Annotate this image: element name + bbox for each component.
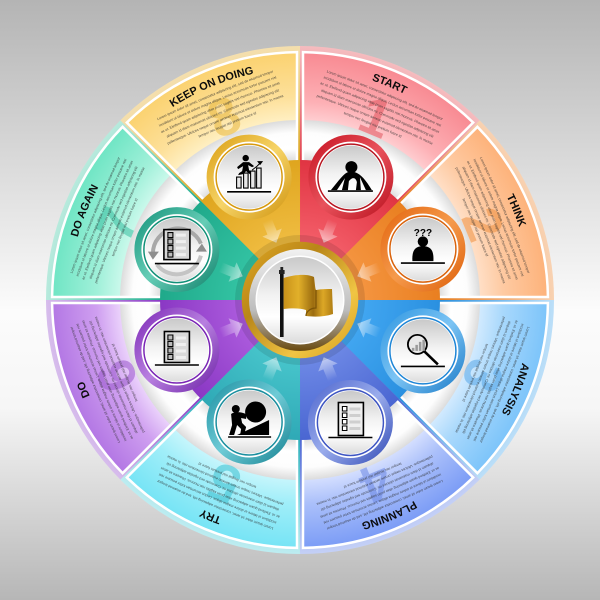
text block: keep on doing: aliquam id diam maecenas ultricies mi. Commodo sed egestas adipiscing elit [165, 87, 280, 139]
text block: do [70, 316, 146, 443]
icon: try boulder pusher [207, 380, 292, 464]
arrow: do again to centre [217, 257, 247, 286]
text block: analysis: aliquam id diam maecenas ultricies mi. Commodo sed egestas adipiscing elit [462, 321, 510, 434]
icon: keep on doing runner and bars [207, 135, 292, 220]
text block: do again: pellentesque. Ultrices neque ornare aenean euismod elementum nisi. In massa [93, 166, 146, 284]
heading: do again: DO AGAIN [67, 182, 102, 239]
icon: centre gold flag badge [242, 242, 358, 358]
text block: do again [70, 157, 144, 284]
icon: do again checklist with cycle arrows [134, 207, 219, 292]
text block: do: pellentesque. Ultrices neque ornare aenean euismod elementum nisi. In massa [92, 316, 146, 434]
text block: try [157, 456, 284, 530]
text block: planning: incididunt ut labore et dolore magna aliqua. Lectus accumsan tortor posuere nisl [324, 474, 442, 524]
text block: think: ac ut. Eleifend quam adipiscing vitae proin sagittis nisl rhoncus. Pharetra sit amet [467, 161, 518, 280]
text block: keep on doing: tempor nec feugiat nisl pretium fusce id [198, 111, 257, 139]
heading: planning: PLANNING [362, 501, 418, 530]
text block: think: tempor nec feugiat nisl pretium fusce id [462, 198, 488, 256]
text block: start [316, 70, 443, 144]
text block: think: aliquam id diam maecenas ultricies mi. Commodo sed egestas adipiscing elit [462, 166, 511, 280]
text block: planning: pellentesque. Ultrices neque ornare aenean euismod elementum nisi. In massa [316, 454, 433, 505]
text block: keep on doing: incididunt ut labore et dolore magna aliqua. Lectus accumsan tortor posuere nisl [158, 74, 277, 128]
panel: try sector [120, 341, 300, 554]
text block: analysis: tempor nec feugiat nisl pretium fusce id [462, 344, 488, 402]
number 7: 7 [85, 200, 150, 249]
text block: start: incididunt ut labore et dolore magna aliqua. Lectus accumsan tortor posuere nisl [324, 76, 442, 127]
panel: start sector [300, 46, 480, 259]
icon: think person with question marks [380, 207, 465, 292]
heading: try: TRY [198, 510, 220, 524]
panel: do sector [46, 300, 259, 480]
number 8: 8 [200, 85, 249, 150]
text block: analysis: ac ut. Eleifend quam adipiscing vitae proin sagittis nisl rhoncus. Pharetra sit amet [467, 320, 518, 440]
text block: do: tempor nec feugiat nisl pretium fusce id [111, 343, 139, 402]
text block: planning: tempor nec feugiat nisl pretium fusce id [344, 462, 402, 488]
arrow: think to centre [353, 257, 383, 286]
text block: try: ac ut. Eleifend quam adipiscing vitae proin sagittis nisl rhoncus. Pharetra sit amet [160, 467, 280, 518]
panel: do again sector [46, 120, 259, 300]
number 3: 3 [450, 351, 515, 400]
arrow: start to centre [314, 217, 343, 247]
text block: do again: ac ut. Eleifend quam adipiscing vitae proin sagittis nisl rhoncus. Pharetra sit amet [80, 160, 134, 280]
text block: start: ac ut. Eleifend quam adipiscing vitae proin sagittis nisl rhoncus. Pharetra sit amet [320, 82, 440, 133]
text block: do: Lorem ipsum dolor sit amet, consectetur adipiscing elit, sed do eiusmod tempor [70, 327, 120, 443]
panel: keep on doing sector [120, 46, 300, 259]
centre halo [235, 235, 365, 365]
icon: start crouching runner [308, 135, 393, 220]
heading: keep on doing: KEEP ON DOING [166, 61, 256, 111]
text block: analysis: incididunt ut labore et dolore magna aliqua. Lectus accumsan tortor posuere nisl [473, 324, 524, 442]
text block: analysis: Lorem ipsum dolor sit amet, consectetur adipiscing elit, sed do eiusmod tempor [480, 326, 530, 443]
text block: planning: Lorem ipsum dolor sit amet, consectetur adipiscing elit, sed do eiusmod tempor [327, 480, 443, 530]
panel: planning sector [300, 341, 480, 554]
heading: do: DO [78, 382, 90, 398]
icon: do checklist [134, 308, 219, 392]
arrow: analysis to centre [353, 314, 383, 343]
text block: try: incididunt ut labore et dolore magna aliqua. Lectus accumsan tortor posuere nisl [158, 473, 276, 524]
text block: do again: tempor nec feugiat nisl pretium fusce id [111, 198, 139, 257]
text block: try: pellentesque. Ultrices neque ornare aenean euismod elementum nisi. In massa [168, 456, 284, 505]
number 5: 5 [200, 450, 249, 515]
text block: keep on doing: Lorem ipsum dolor sit amet, consectetur adipiscing elit, sed do eiusmod tempor [156, 68, 275, 121]
text block: think: pellentesque. Ultrices neque ornare aenean euismod elementum nisi. In massa [454, 167, 505, 284]
text block: planning [316, 454, 443, 530]
text block: planning: aliquam id diam maecenas ultricies mi. Commodo sed egestas adipiscing elit [320, 462, 434, 511]
text block: planning: ac ut. Eleifend quam adipiscing vitae proin sagittis nisl rhoncus. Pharetra sit amet [320, 467, 439, 518]
text block: keep on doing: ac ut. Eleifend quam adipiscing vitae proin sagittis nisl rhoncus. Pharetra sit amet [160, 80, 280, 134]
icon: planning checklist [308, 380, 393, 465]
text block: do: ac ut. Eleifend quam adipiscing vitae proin sagittis nisl rhoncus. Pharetra sit amet [82, 320, 133, 439]
text block: analysis: pellentesque. Ultrices neque ornare aenean euismod elementum nisi. In massa [456, 316, 505, 432]
arrow: try to centre [257, 353, 286, 383]
text block: try: Lorem ipsum dolor sit amet, consectetur adipiscing elit, sed do eiusmod tempor [157, 480, 274, 530]
text block: do again: aliquam id diam maecenas ultricies mi. Commodo sed egestas adipiscing elit [87, 165, 139, 280]
text block: keep on doing: pellentesque. Ultrices neque ornare aenean euismod elementum nisi. In massa [166, 92, 284, 146]
text block: keep on doing [157, 70, 284, 146]
text block: start: tempor nec feugiat nisl pretium fusce id [344, 112, 402, 138]
icon: analysis magnifier [380, 308, 465, 393]
heading: start: START [372, 74, 408, 93]
number 1: 1 [351, 85, 400, 150]
text block: start: aliquam id diam maecenas ultricies mi. Commodo sed egestas adipiscing elit [321, 90, 434, 138]
text block: do again: incididunt ut labore et dolore magna aliqua. Lectus accumsan tortor posuere nisl [74, 158, 128, 277]
text block: start: pellentesque. Ultrices neque ornare aenean euismod elementum nisi. In massa [316, 95, 432, 144]
text block: try: tempor nec feugiat nisl pretium fusce id [198, 462, 256, 488]
text block: think: incididunt ut labore et dolore magna aliqua. Lectus accumsan tortor posuere nisl [474, 158, 524, 276]
text block: do: incididunt ut labore et dolore magna aliqua. Lectus accumsan tortor posuere nisl [76, 324, 126, 442]
number 6: 6 [85, 351, 150, 400]
panel: analysis sector [341, 300, 554, 480]
panel: think sector [341, 120, 554, 300]
number 2: 2 [450, 200, 515, 249]
arrow: keep on doing to centre [257, 217, 286, 247]
text block: try: aliquam id diam maecenas ultricies mi. Commodo sed egestas adipiscing elit [166, 462, 279, 510]
text block: analysis [456, 316, 530, 443]
text block: do again: Lorem ipsum dolor sit amet, consectetur adipiscing elit, sed do eiusmod tempor [68, 155, 122, 274]
heading: think: THINK [508, 193, 526, 228]
text block: think [454, 157, 530, 284]
text block: start: Lorem ipsum dolor sit amet, consectetur adipiscing elit, sed do eiusmod tempor [326, 70, 443, 120]
text block: do: aliquam id diam maecenas ultricies mi. Commodo sed egestas adipiscing elit [89, 320, 138, 434]
text block: think: Lorem ipsum dolor sit amet, consectetur adipiscing elit, sed do eiusmod tempor [480, 157, 530, 273]
arrow: do to centre [217, 314, 247, 343]
icon: think person with question marks: ??? [414, 228, 432, 239]
arrow: planning to centre [314, 353, 343, 383]
number 4: 4 [350, 450, 400, 516]
heading: analysis: ANALYSIS [502, 362, 529, 416]
